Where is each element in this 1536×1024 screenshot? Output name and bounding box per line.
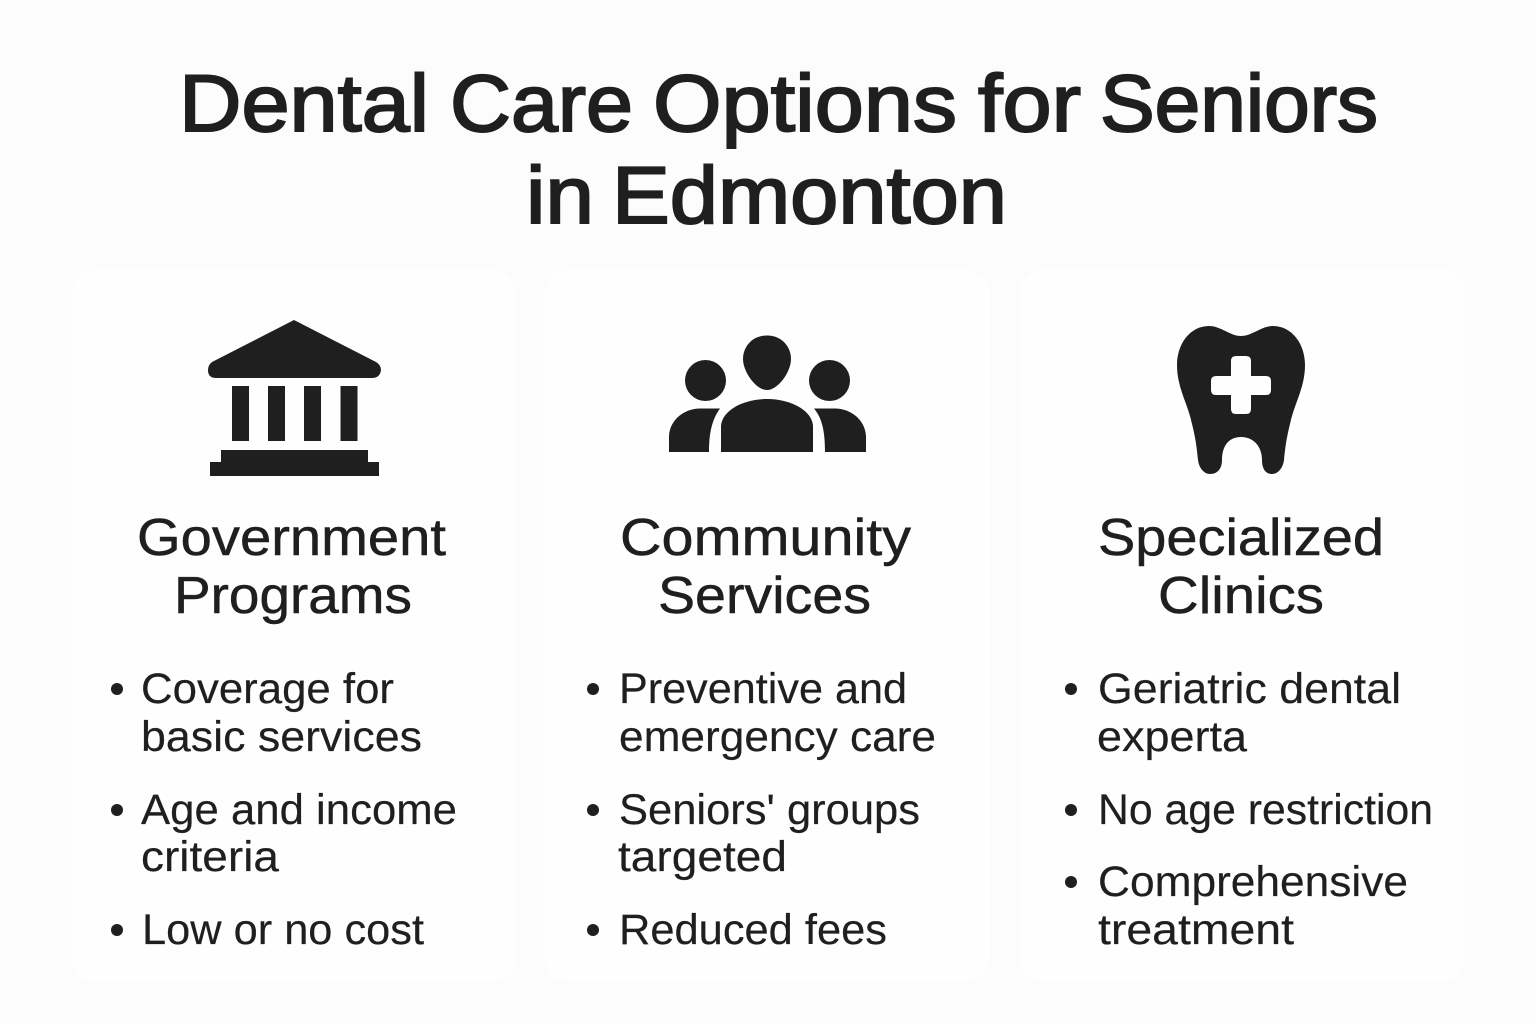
list: community services: Reduced fees <box>619 906 887 954</box>
list: specialized clinics: Comprehensive <box>1098 858 1408 906</box>
heading: specialized clinics: Specialized <box>1098 509 1384 567</box>
title <box>179 59 1378 241</box>
list: government programs: basic services <box>141 713 422 761</box>
title: Seniors <box>1100 59 1378 149</box>
list: government programs: Coverage for <box>141 665 394 713</box>
list: government programs: criteria <box>141 833 279 881</box>
list: specialized clinics <box>1065 665 1433 954</box>
title: Edmonton <box>612 151 1007 241</box>
list: community services <box>587 665 936 954</box>
heading: specialized clinics: Clinics <box>1158 567 1324 625</box>
list: government programs: Age and income <box>141 786 457 834</box>
heading: community services <box>620 509 911 625</box>
title: in <box>526 151 594 241</box>
title: Care <box>450 59 633 149</box>
heading: specialized clinics <box>1098 509 1384 625</box>
list: specialized clinics: treatment <box>1098 906 1294 954</box>
title: for <box>978 59 1081 149</box>
heading: government programs: Programs <box>174 567 412 625</box>
list: government programs: Low or no cost <box>142 906 424 954</box>
heading: community services: Community <box>620 509 911 567</box>
list: specialized clinics: experta <box>1097 713 1247 761</box>
icon: government building <box>208 320 381 476</box>
heading: government programs <box>137 509 447 625</box>
panel: community services <box>545 270 990 982</box>
icon: tooth with cross <box>1177 326 1305 474</box>
panel: government programs <box>72 270 515 982</box>
list: community services: Seniors' groups <box>619 786 920 834</box>
list: specialized clinics: Geriatric dental <box>1098 665 1401 713</box>
list: government programs <box>111 665 457 954</box>
heading: community services: Services <box>658 567 871 625</box>
list: community services: emergency care <box>619 713 936 761</box>
list: community services: targeted <box>618 833 787 881</box>
list: community services: Preventive and <box>619 665 907 713</box>
list: specialized clinics: No age restriction <box>1098 786 1433 834</box>
title: Dental <box>179 59 429 149</box>
panel: specialized clinics <box>1020 270 1465 982</box>
heading: government programs: Government <box>137 509 447 567</box>
title: Options <box>653 59 957 149</box>
icon: group of people <box>669 336 866 452</box>
